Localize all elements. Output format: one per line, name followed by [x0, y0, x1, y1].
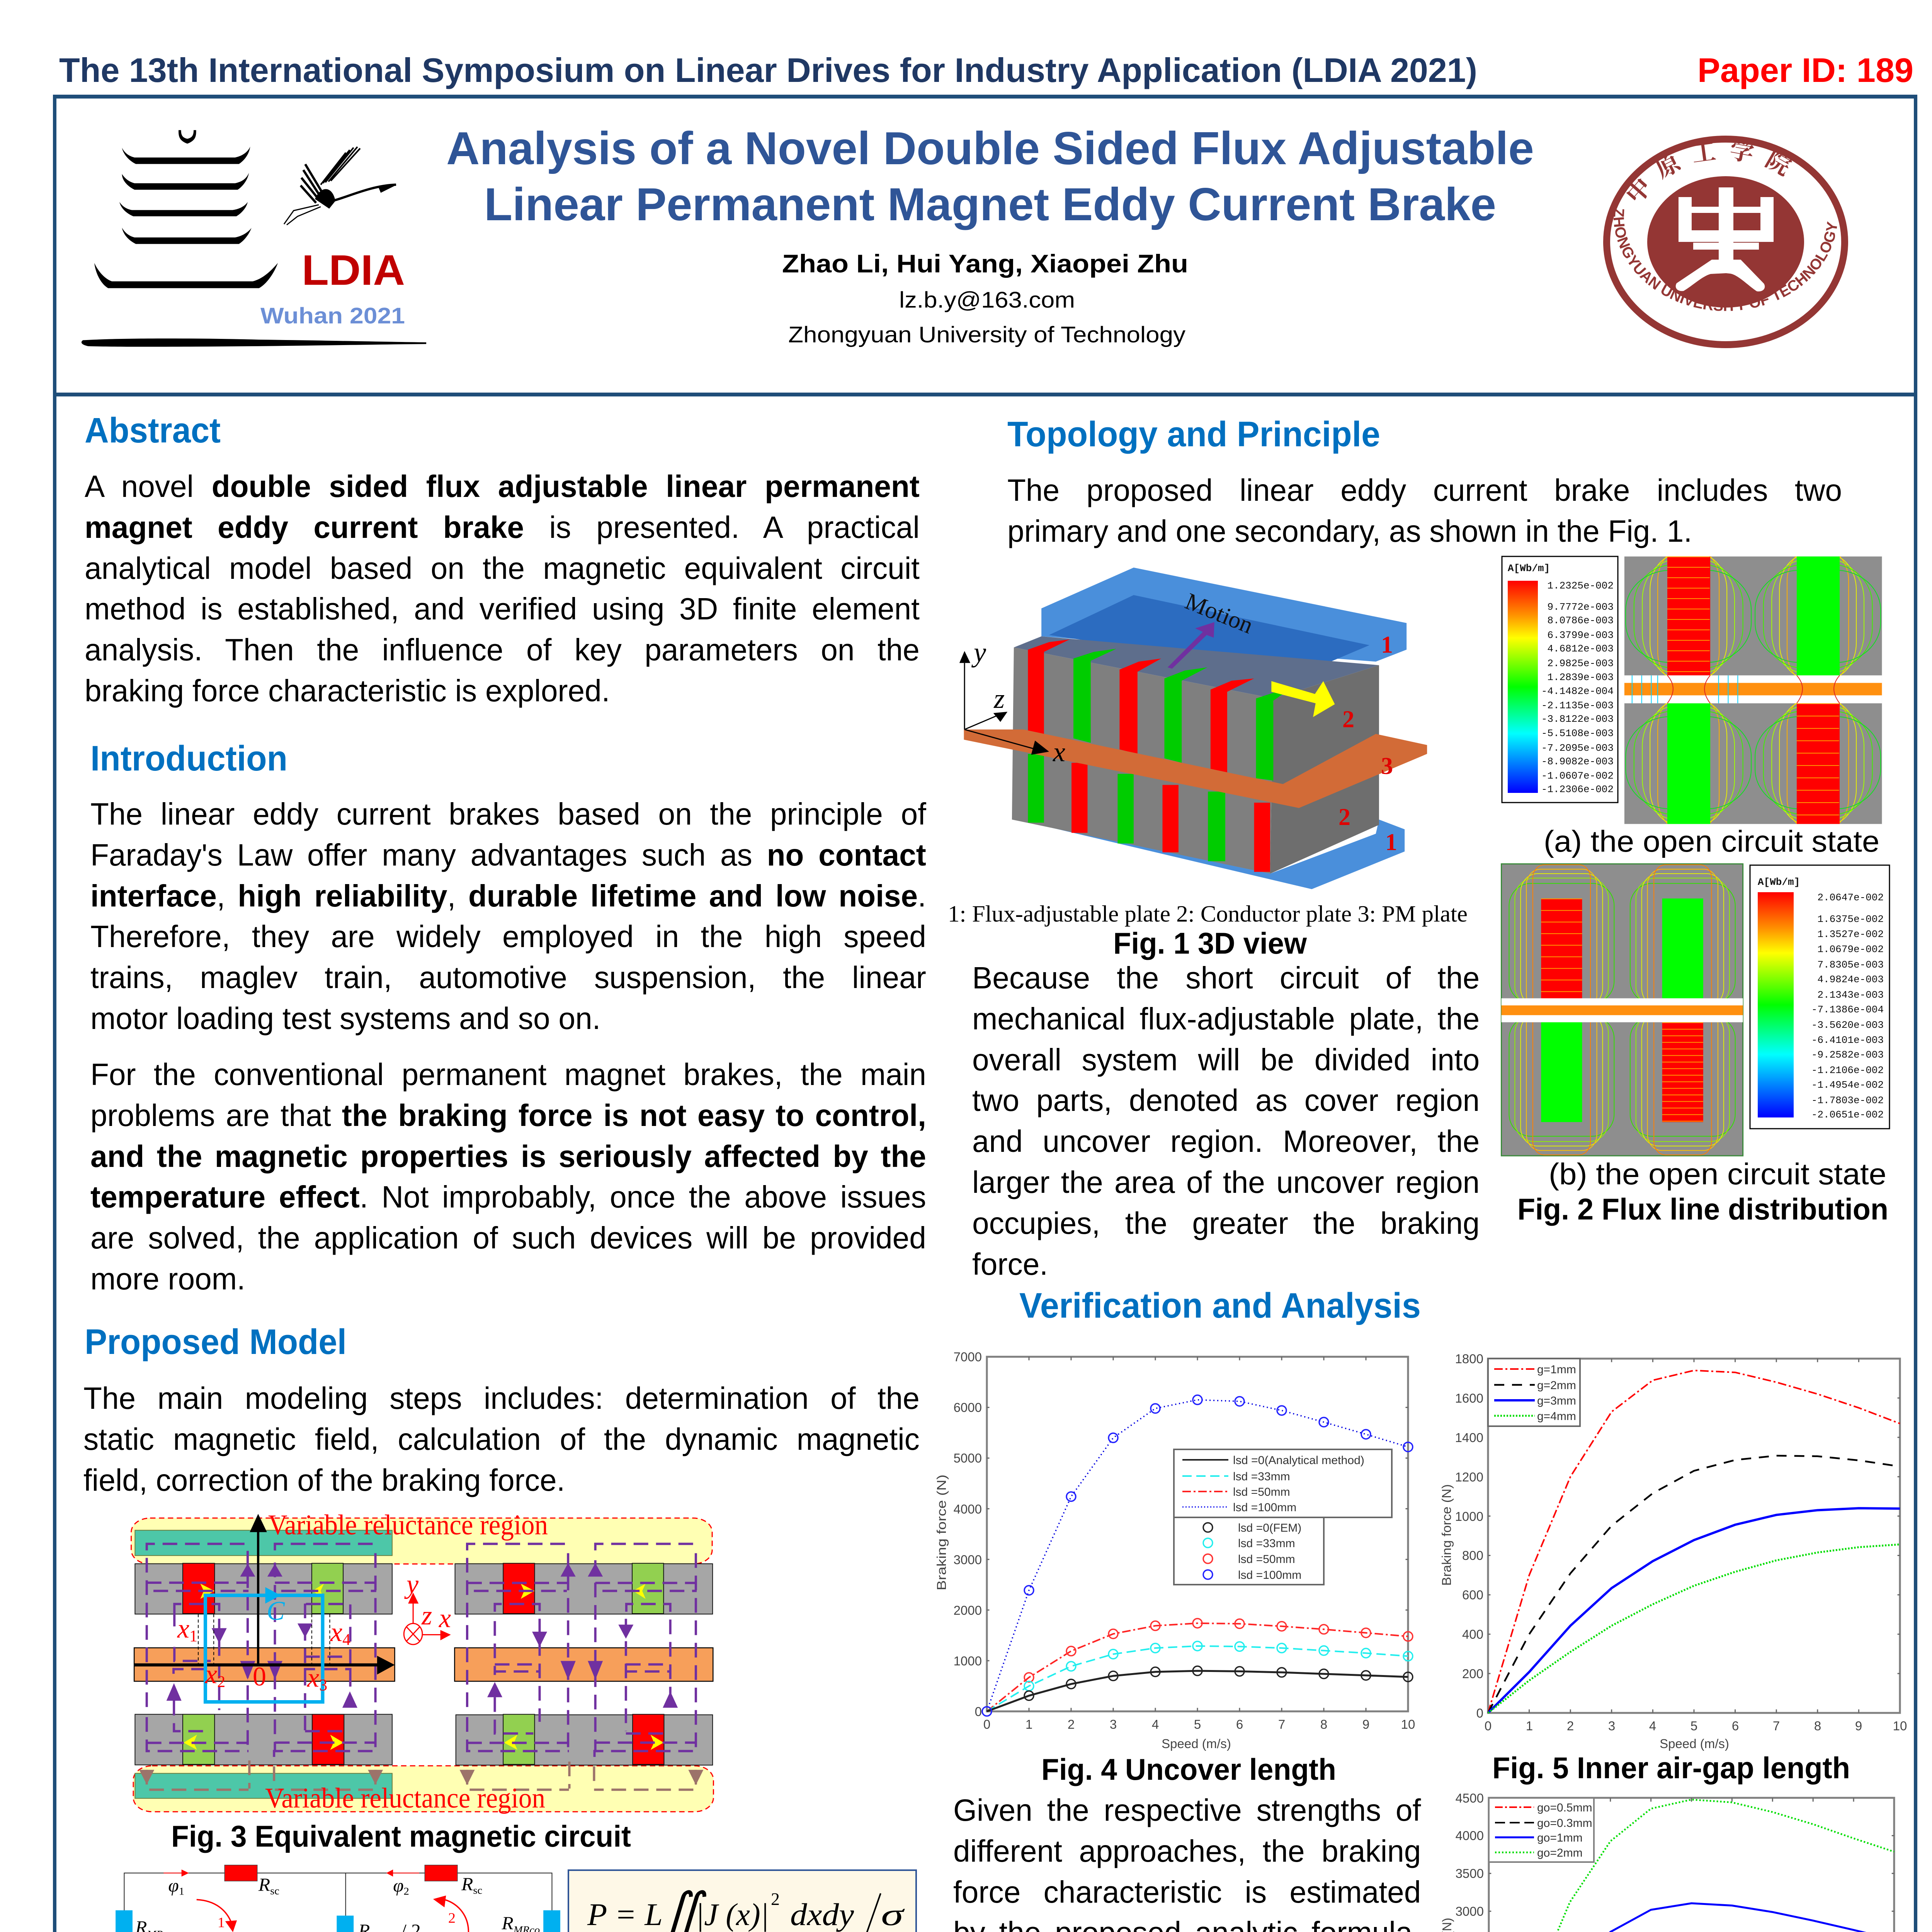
- figure 1: 3D view: 2: [1338, 804, 1350, 830]
- purple flux arrows: [167, 1563, 678, 1708]
- axes: [134, 1527, 381, 1666]
- proposed model text: [83, 1378, 920, 1500]
- data series: [1489, 1799, 1894, 1932]
- introduction paragraph 1: The linear eddy current brakes based on the principle of: [90, 797, 926, 831]
- tick labels: [1439, 1352, 1907, 1751]
- title: Analysis of a Novel Double Sided Flux Adjustable: [446, 122, 1534, 174]
- introduction paragraph 2: and the magnetic properties is seriously affected by the: [90, 1139, 926, 1173]
- circuit labels: R: [259, 1875, 270, 1895]
- abstract text: A novel double sided flux adjustable linear permanent: [85, 469, 920, 503]
- figure 5 caption: Fig. 5 Inner air-gap length: [1492, 1751, 1850, 1785]
- icon: university seal: [1607, 130, 1845, 345]
- heading: proposed model: Proposed Model: [85, 1322, 347, 1362]
- paper id: Paper ID: 189: [1697, 51, 1913, 89]
- proposed model text: static magnetic field, calculation of the dynamic magnetic: [83, 1422, 920, 1456]
- logo text Wuhan 2021: Wuhan 2021: [260, 303, 405, 328]
- abstract text: method is established, and verified using 3D finite element: [85, 592, 920, 626]
- tick labels: 1600: [1455, 1391, 1483, 1405]
- tick labels: 4000: [954, 1502, 982, 1516]
- sc resistors: [224, 1865, 460, 1932]
- colour legend a: 4.6812e-003: [1547, 643, 1614, 655]
- labels: [265, 1509, 548, 1814]
- figure 2a: flux plot: [1502, 550, 1882, 829]
- tick labels: 0: [1485, 1719, 1492, 1733]
- colour legend a: -8.9082e-003: [1541, 756, 1614, 767]
- colour legend a: [1502, 556, 1618, 803]
- figure 3: equivalent magnetic circuit: 0: [253, 1662, 266, 1692]
- legend: lsd =0(FEM): [1238, 1522, 1301, 1534]
- affiliation: Zhongyuan University of Technology: [788, 322, 1185, 347]
- tick labels: 3000: [954, 1553, 982, 1567]
- flux-adjustable plate text: Because the short circuit of the: [972, 961, 1480, 995]
- colour legend b: -1.2106e-002: [1811, 1065, 1884, 1076]
- loop numbers: 1: [218, 1915, 225, 1930]
- circuit labels: 2: [404, 1886, 409, 1897]
- axes box: [987, 1357, 1408, 1711]
- legend: lsd =100mm: [1238, 1569, 1301, 1582]
- colour legend a: -3.8122e-003: [1541, 713, 1614, 725]
- topology text: The proposed linear eddy current brake includes two: [1007, 473, 1842, 507]
- tick labels: 4000: [1456, 1828, 1484, 1843]
- figure 1: 3D view: [959, 568, 1427, 889]
- circuit labels: sc: [270, 1885, 279, 1897]
- legend: g=2mm: [1537, 1379, 1576, 1392]
- tick labels: 8: [1814, 1719, 1821, 1733]
- colour legend b: -2.0651e-002: [1811, 1109, 1884, 1121]
- tick labels: 7000: [954, 1350, 982, 1364]
- tick labels: 0: [983, 1717, 990, 1731]
- introduction paragraph 2: temperature effect. Not improbably, once the above issues: [90, 1180, 926, 1214]
- heading: abstract: Abstract: [85, 411, 221, 450]
- flux-adjustable plate text: overall system will be divided into: [972, 1043, 1480, 1077]
- introduction paragraph 1: Therefore, they are widely employed in the high speed: [90, 919, 926, 954]
- variable reluctance region top: [131, 1518, 712, 1564]
- chart: external air-gap length: [1440, 1791, 1901, 1932]
- abstract text: analytical model based on the magnetic equivalent circuit: [85, 551, 920, 585]
- introduction paragraph 1: trains, maglev train, automotive suspension, the linear: [90, 960, 926, 995]
- figure 3: equivalent magnetic circuit: x: [439, 1604, 451, 1633]
- tick labels: 2000: [954, 1603, 982, 1617]
- figure 3: equivalent magnetic circuit: 1: [189, 1628, 197, 1645]
- colour legend b: 1.6375e-002: [1817, 913, 1884, 925]
- logo text LDIA: LDIA: [302, 247, 405, 294]
- figure 1: 3D view: y: [971, 637, 986, 668]
- colour legend a: -4.1482e-004: [1541, 685, 1614, 697]
- tick labels: 4500: [1456, 1791, 1484, 1805]
- tick labels: 1000: [954, 1654, 982, 1668]
- tick labels: 0: [975, 1704, 982, 1719]
- flux-adjustable plate text: [972, 957, 1480, 1284]
- colour legend b: 1.3527e-002: [1817, 929, 1884, 940]
- legend: lsd =33mm: [1233, 1470, 1290, 1483]
- figure 3: equivalent magnetic circuit: 2: [217, 1673, 225, 1691]
- tick labels: Braking force (N): [934, 1475, 949, 1590]
- title: Linear Permanent Magnet Eddy Current Brake: [484, 179, 1496, 230]
- flux-adjustable plate text: occupies, the greater the braking: [972, 1206, 1480, 1240]
- circuit labels: 1: [179, 1886, 184, 1897]
- figure 1: 3D view: 2: [1342, 706, 1354, 733]
- field plot a: [1624, 550, 1882, 829]
- figure 1 legend: 1: Flux-adjustable plate 2: Conductor plate 3: PM plate: [948, 901, 1468, 927]
- figure 3: equivalent magnetic circuit: C: [267, 1596, 285, 1626]
- figure 1 caption: Fig. 1 3D view: [1113, 926, 1307, 960]
- tick labels: 3: [1608, 1719, 1615, 1733]
- chart: inner air-gap length: [1439, 1352, 1907, 1751]
- proposed model text: field, correction of the braking force.: [83, 1463, 565, 1497]
- equation box: power and force: P = L: [587, 1897, 663, 1932]
- title: [446, 122, 1534, 230]
- colour legend b: -7.1386e-004: [1811, 1004, 1884, 1015]
- tick labels: 9: [1855, 1719, 1862, 1733]
- circuit labels: φ: [393, 1876, 404, 1896]
- legend: lsd =0(Analytical method): [1233, 1454, 1364, 1467]
- introduction paragraph 2: problems are that the braking force is not easy to control,: [90, 1098, 926, 1133]
- axes box: [1488, 1359, 1900, 1713]
- colour legend b: [1750, 865, 1889, 1129]
- labels: Variable reluctance region: [265, 1782, 545, 1814]
- colour legend a: -2.1135e-003: [1541, 700, 1614, 711]
- colour legend b: 1.0679e-002: [1817, 944, 1884, 955]
- flux-adjustable plate text: mechanical flux-adjustable plate, the: [972, 1002, 1480, 1036]
- verification text: force characteristic is estimated: [953, 1875, 1421, 1909]
- tick labels: 1000: [1455, 1509, 1483, 1524]
- introduction paragraph 2: [90, 1054, 926, 1299]
- flux-adjustable plate text: larger the area of the uncover region: [972, 1165, 1480, 1199]
- tick labels: 800: [1462, 1548, 1483, 1563]
- variable reluctance region bottom: [133, 1766, 713, 1812]
- tick labels: 1400: [1455, 1430, 1483, 1445]
- tick labels: Speed (m/s): [1660, 1736, 1729, 1751]
- heading: topology and principle: Topology and Principle: [1007, 415, 1380, 454]
- flux-adjustable plate text: two parts, denoted as cover region: [972, 1083, 1480, 1117]
- tick labels: 1800: [1455, 1352, 1483, 1366]
- legend: [1489, 1798, 1594, 1862]
- introduction paragraph 2: more room.: [90, 1262, 245, 1296]
- flux-adjustable plate text: and uncover region. Moreover, the: [972, 1124, 1480, 1158]
- tick labels: 6: [1732, 1719, 1739, 1733]
- figure 3: equivalent magnetic circuit: [131, 1509, 713, 1814]
- tick labels: 3: [1110, 1717, 1117, 1731]
- colour legend b: -1.7803e-002: [1811, 1095, 1884, 1106]
- colour legend a: A[Wb/m]: [1508, 563, 1550, 574]
- colour legend a: 8.0786e-003: [1547, 615, 1614, 626]
- legend: go=1mm: [1537, 1832, 1583, 1844]
- tick labels: 1: [1526, 1719, 1533, 1733]
- legend: g=4mm: [1537, 1410, 1576, 1423]
- verification text: different approaches, the braking: [953, 1834, 1421, 1868]
- crane: [284, 147, 396, 225]
- heading: introduction: Introduction: [90, 739, 287, 778]
- tick labels: 2: [1068, 1717, 1075, 1731]
- abstract text: braking force characteristic is explored.: [85, 673, 610, 708]
- colour legend a: 1.2325e-002: [1547, 580, 1614, 592]
- caption: open circuit state b: (b) the open circuit state: [1549, 1157, 1886, 1191]
- colour legend b: -6.4101e-003: [1811, 1034, 1884, 1046]
- field plot b: [1502, 864, 1743, 1156]
- purple flux paths: [147, 1544, 697, 1790]
- tick labels: 200: [1462, 1667, 1483, 1681]
- figure 4: the whole system circuit: [115, 1865, 560, 1932]
- caption: open circuit state a: (a) the open circuit state: [1544, 824, 1879, 858]
- tick labels: 5: [1194, 1717, 1201, 1731]
- abstract text: [85, 466, 920, 711]
- tick labels: 7: [1278, 1717, 1285, 1731]
- heading: verification and analysis: Verification and Analysis: [1019, 1286, 1421, 1325]
- figure 3 caption: Fig. 3 Equivalent magnetic circuit: [171, 1819, 631, 1853]
- colour legend a: 1.2839e-003: [1547, 672, 1614, 683]
- tick labels: 5: [1690, 1719, 1697, 1733]
- tick labels: 1200: [1455, 1470, 1483, 1484]
- air-gap and iron reluctances: [115, 1910, 560, 1932]
- figure 4 uncover caption: Fig. 4 Uncover length: [1041, 1752, 1336, 1786]
- figure 1: 3D view: 3: [1381, 753, 1393, 779]
- integration loop C: [205, 1595, 323, 1702]
- data series: [1488, 1371, 1900, 1713]
- colour legend a: -7.2095e-003: [1541, 742, 1614, 754]
- tick labels: 1: [1026, 1717, 1032, 1731]
- tick labels: 10: [1401, 1717, 1415, 1731]
- circuit labels: [132, 1874, 545, 1932]
- loop numbers: 2: [448, 1911, 456, 1926]
- figure 1: 3D view: 1: [1381, 632, 1393, 658]
- colour legend b: -1.4954e-002: [1811, 1079, 1884, 1091]
- figure 1: 3D view: z: [993, 683, 1005, 714]
- tick labels: 6000: [954, 1400, 982, 1415]
- tick labels: 3000: [1456, 1904, 1484, 1918]
- abstract text: analysis. Then the influence of key parameters on the: [85, 633, 920, 667]
- figure 3: equivalent magnetic circuit: x: [177, 1614, 189, 1644]
- legend: lsd =100mm: [1233, 1501, 1296, 1514]
- colour legend a: -1.2306e-002: [1541, 784, 1614, 795]
- loop numbers: [168, 1911, 468, 1932]
- colour legend b: 4.9824e-003: [1817, 974, 1884, 985]
- email: lz.b.y@163.com: [899, 287, 1075, 313]
- icon: university seal: 中原工学院: [1616, 130, 1808, 210]
- equation box: power and force: 2: [771, 1889, 780, 1909]
- tick labels: 400: [1462, 1627, 1483, 1641]
- colour legend b: -3.5620e-003: [1811, 1019, 1884, 1031]
- introduction paragraph 1: [90, 794, 926, 1039]
- figure 3: equivalent magnetic circuit: y: [404, 1570, 419, 1599]
- data series: [987, 1400, 1408, 1711]
- figure 3: equivalent magnetic circuit: z: [421, 1601, 432, 1631]
- wires: [124, 1873, 552, 1932]
- tick labels: 8: [1320, 1717, 1327, 1731]
- colour legend a: 9.7772e-003: [1547, 601, 1614, 613]
- icon: university seal: ZHONGYUAN UNIVERSITY OF TECHNOLOGY: [1610, 207, 1841, 315]
- colour legend b: A[Wb/m]: [1758, 876, 1800, 888]
- circuit labels: φ: [168, 1876, 179, 1896]
- axes box: [1489, 1798, 1894, 1932]
- tick labels: Speed (m/s): [1162, 1736, 1231, 1751]
- introduction paragraph 2: are solved, the application of such devices will be provided: [90, 1221, 926, 1255]
- legend: [1174, 1449, 1392, 1585]
- figure 3: equivalent magnetic circuit: 3: [319, 1677, 327, 1694]
- colour legend a: 6.3799e-003: [1547, 629, 1614, 641]
- tick labels: Braking force (N): [1439, 1484, 1454, 1586]
- introduction paragraph 1: motor loading test systems and so on.: [90, 1001, 600, 1036]
- colour legend a: 2.9825e-003: [1547, 658, 1614, 669]
- figure 3: equivalent magnetic circuit: x: [205, 1660, 217, 1689]
- figure 2b: flux plot: [1502, 864, 1889, 1156]
- legend: lsd =50mm: [1238, 1553, 1295, 1566]
- tick labels: [1440, 1791, 1901, 1932]
- tick labels: 9: [1362, 1717, 1369, 1731]
- tick labels: 2: [1567, 1719, 1574, 1733]
- legend: go=0.3mm: [1537, 1817, 1592, 1830]
- legend: g=3mm: [1537, 1395, 1576, 1407]
- abstract text: magnet eddy current brake is presented. A practical: [85, 510, 920, 544]
- colour legend b: 7.8305e-003: [1817, 959, 1884, 971]
- verification text: [953, 1790, 1421, 1932]
- authors: Zhao Li, Hui Yang, Xiaopei Zhu: [782, 249, 1188, 278]
- flux-adjustable plate text: force.: [972, 1247, 1048, 1281]
- tick labels: 6: [1236, 1717, 1243, 1731]
- legend: [1488, 1359, 1580, 1426]
- introduction paragraph 1: Faraday's Law offer many advantages such as no contact: [90, 838, 926, 872]
- legend: go=0.5mm: [1537, 1801, 1592, 1814]
- circuit labels: R: [461, 1874, 473, 1895]
- tick labels: [934, 1350, 1415, 1751]
- equation box: power and force: σ: [881, 1897, 905, 1932]
- colour legend b: 2.0647e-002: [1817, 892, 1884, 903]
- verification text: Given the respective strengths of: [953, 1793, 1421, 1827]
- tick labels: 7: [1773, 1719, 1780, 1733]
- introduction paragraph 2: For the conventional permanent magnet brakes, the main: [90, 1057, 926, 1092]
- chart: uncover length: [934, 1350, 1415, 1751]
- figure 1: 3D view: x: [1053, 736, 1065, 767]
- figure 1: 3D view: 1: [1385, 829, 1397, 855]
- introduction paragraph 1: interface, high reliability, durable lifetime and low noise.: [90, 879, 926, 913]
- figure 3: equivalent magnetic circuit: x: [330, 1617, 342, 1647]
- legend: lsd =50mm: [1233, 1486, 1290, 1498]
- small axis symbol: [404, 1604, 441, 1645]
- tick labels: 3500: [1456, 1866, 1484, 1881]
- circuit labels: sc: [473, 1884, 482, 1896]
- equation box: power and force: dxdy: [790, 1897, 854, 1932]
- topology text: [1007, 470, 1842, 552]
- loop arrows: [124, 1873, 552, 1932]
- figure 3: equivalent magnetic circuit: x: [307, 1663, 319, 1693]
- figure 1: 3D view: Motion: [1182, 588, 1257, 639]
- figure 3: equivalent magnetic circuit: 4: [342, 1631, 350, 1649]
- figure 2 caption: Fig. 2 Flux line distribution: [1517, 1192, 1888, 1226]
- legend: go=2mm: [1537, 1847, 1583, 1859]
- legend: g=1mm: [1537, 1363, 1576, 1376]
- labels: Variable reluctance region: [268, 1509, 548, 1541]
- tick labels: 5000: [954, 1451, 982, 1465]
- tick labels: 0: [1476, 1706, 1483, 1720]
- icon: LDIA pagoda logo: [82, 130, 426, 347]
- conference name: The 13th International Symposium on Linear Drives for Industry Application (LDIA 2021): [59, 51, 1477, 89]
- equation box: power and force: |J (x)|: [696, 1897, 769, 1932]
- tick labels: 4: [1152, 1717, 1159, 1731]
- tick labels: 10: [1893, 1719, 1907, 1733]
- colour legend a: -1.0607e-002: [1541, 770, 1614, 782]
- tick labels: 4: [1649, 1719, 1656, 1733]
- legend: lsd =33mm: [1238, 1537, 1295, 1550]
- colour legend b: -9.2582e-003: [1811, 1049, 1884, 1061]
- colour legend b: 2.1343e-003: [1817, 989, 1884, 1001]
- tick labels: 600: [1462, 1588, 1483, 1602]
- topology text: primary and one secondary, as shown in the Fig. 1.: [1007, 514, 1692, 548]
- colour legend a: -5.5108e-003: [1541, 728, 1614, 739]
- equation box: power and force: [568, 1870, 916, 1932]
- proposed model text: The main modeling steps includes: determination of the: [83, 1381, 920, 1415]
